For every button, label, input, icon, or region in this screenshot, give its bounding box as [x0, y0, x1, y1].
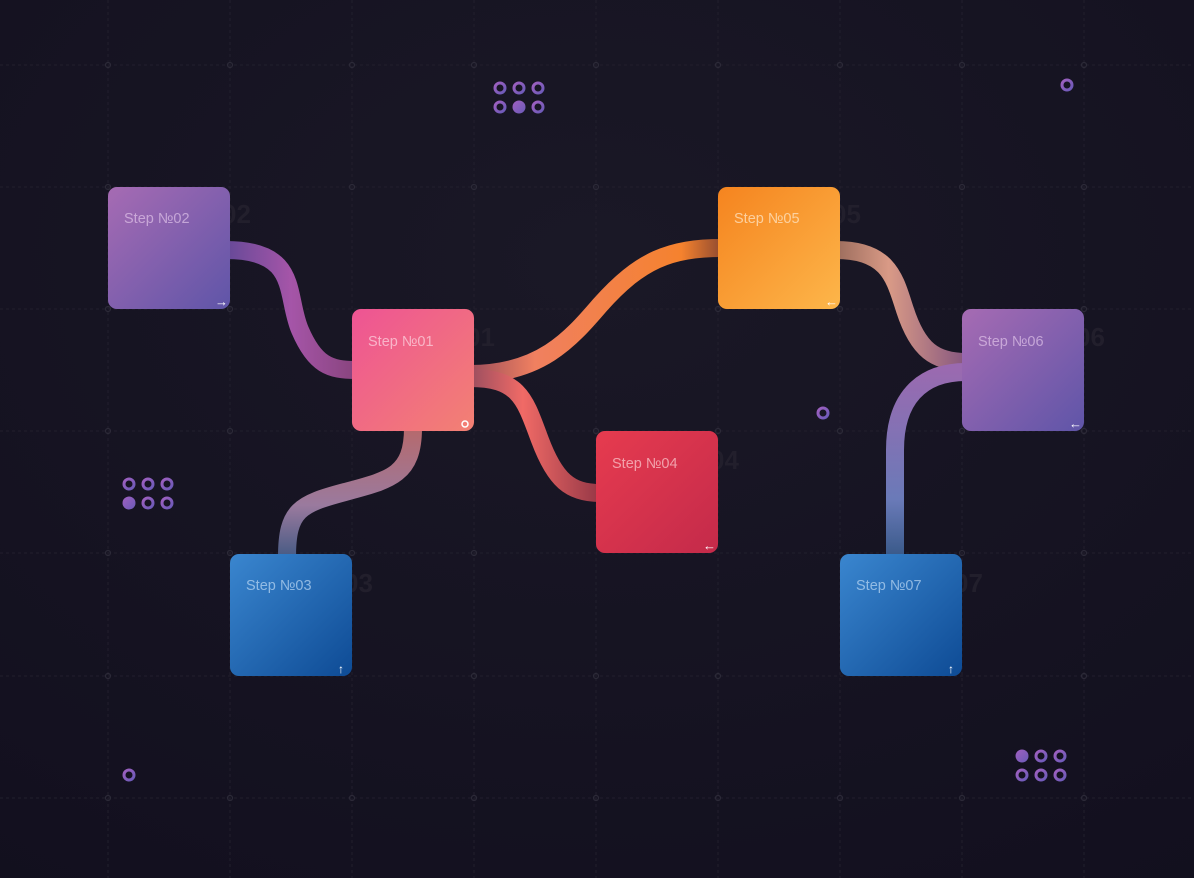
decorative dot cluster top	[495, 83, 543, 114]
box: step 07: ↑	[948, 662, 954, 676]
box: step 06	[962, 309, 1084, 431]
connector: 01 to 04	[470, 378, 600, 493]
box: step 03: Step №03	[246, 578, 312, 594]
background numbers: 03	[344, 568, 373, 598]
box: step 03: ↑	[338, 662, 344, 676]
box: step 04: Step №04	[612, 456, 678, 472]
box: step 07: Step №07	[856, 578, 922, 594]
box: step 01: Step №01	[368, 334, 434, 350]
background numbers: 04	[710, 445, 739, 475]
background numbers: 01	[466, 322, 495, 352]
box: step 02: Step №02	[124, 211, 190, 227]
background numbers: 05	[832, 199, 861, 229]
box: step 01	[352, 309, 474, 431]
background numbers: 02	[222, 199, 251, 229]
box: step 06: ←	[1069, 416, 1082, 431]
box: step 03	[230, 554, 352, 676]
decorative single rings	[124, 80, 1072, 780]
connector: 02 to 01	[226, 250, 356, 370]
box: step 04: ←	[703, 538, 716, 553]
background numbers: 06	[1076, 322, 1105, 352]
background numbers: 07	[954, 568, 983, 598]
background numbers	[222, 199, 1105, 598]
box: step 05: Step №05	[734, 211, 800, 227]
box: step 06: Step №06	[978, 334, 1044, 350]
box: step 05	[718, 187, 840, 309]
box: step 04	[596, 431, 718, 553]
decorative dot cluster bottom right	[1016, 750, 1065, 780]
connector: 06 to 07	[895, 372, 966, 557]
box: step 02	[108, 187, 230, 309]
connector: 01 to 03	[287, 428, 413, 557]
decorative dot cluster left	[122, 479, 172, 510]
connector: 01 to 05	[470, 248, 722, 374]
connector: 05 to 06	[836, 250, 966, 362]
box: step 05: ←	[825, 294, 838, 309]
box: step 02: →	[215, 294, 228, 309]
box: step 07	[840, 554, 962, 676]
